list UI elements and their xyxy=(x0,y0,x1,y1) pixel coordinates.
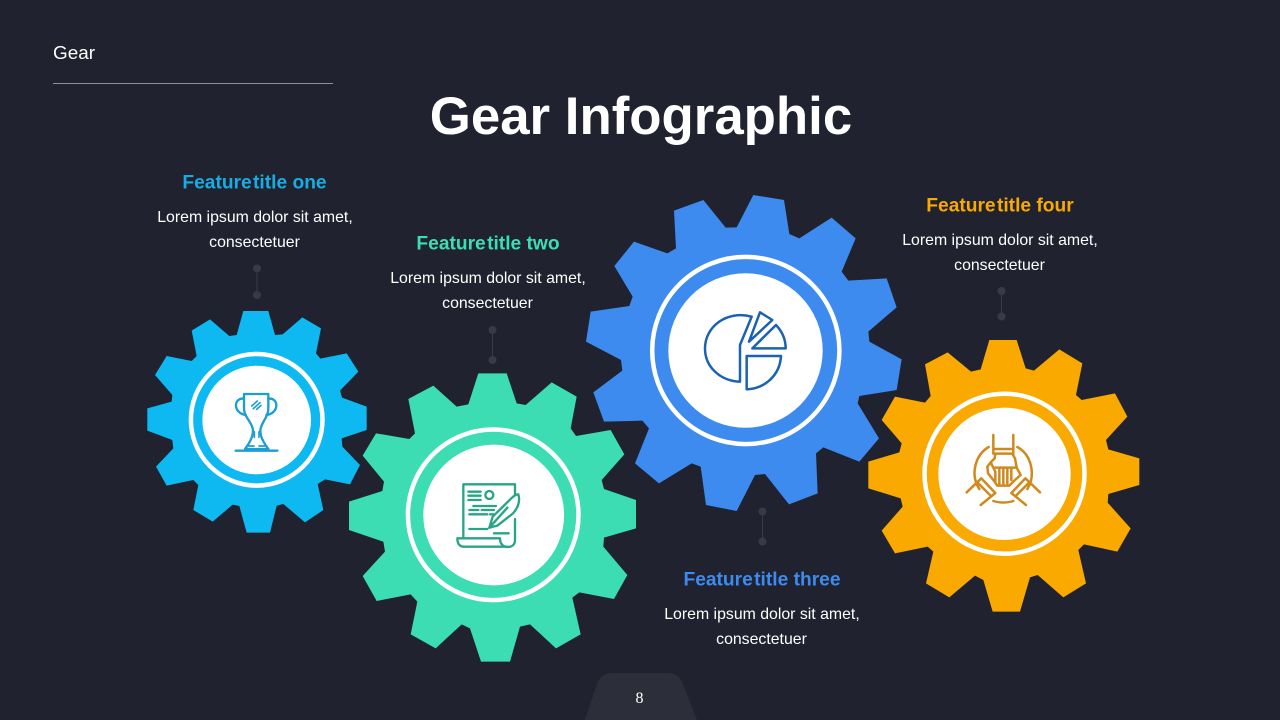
title: Gear Infographic xyxy=(430,87,852,146)
text block: feature three: consectetuer xyxy=(716,631,808,648)
icon: document and quill xyxy=(457,484,519,547)
section label: Gear: Gear xyxy=(53,43,95,64)
gear: two (green) xyxy=(349,373,636,662)
connector: feature three xyxy=(758,508,766,546)
text block: feature two: Feature title two xyxy=(416,234,560,254)
icon: trophy xyxy=(236,394,277,451)
icon: team hands xyxy=(967,435,1040,505)
connector: feature one xyxy=(253,264,261,299)
text block: feature two xyxy=(390,234,586,312)
text block: feature four: Feature title four xyxy=(926,196,1074,216)
gear: four (orange) xyxy=(868,340,1139,612)
text block: feature three xyxy=(664,570,860,648)
text block: feature three: Lorem ipsum dolor sit amet, xyxy=(664,606,860,623)
text block: feature one: consectetuer xyxy=(209,234,301,251)
text block: feature three: Feature title three xyxy=(683,570,841,590)
gear: one (cyan) xyxy=(147,311,367,533)
text block: feature four: consectetuer xyxy=(954,257,1046,274)
page number tab: 8 xyxy=(636,690,644,707)
text block: feature two: Lorem ipsum dolor sit amet, xyxy=(390,270,586,287)
text block: feature one xyxy=(157,172,353,251)
connector: feature four xyxy=(998,287,1006,320)
page number tab xyxy=(585,673,697,720)
connector: feature two xyxy=(488,326,496,364)
gear: three (blue) xyxy=(586,195,902,511)
text block: feature four: Lorem ipsum dolor sit amet, xyxy=(902,232,1098,249)
text block: feature four xyxy=(902,196,1098,274)
icon: pie chart xyxy=(705,312,786,389)
text block: feature two: consectetuer xyxy=(442,295,534,312)
text block: feature one: Lorem ipsum dolor sit amet, xyxy=(157,209,353,226)
text block: feature one: Feature title one xyxy=(182,172,327,194)
